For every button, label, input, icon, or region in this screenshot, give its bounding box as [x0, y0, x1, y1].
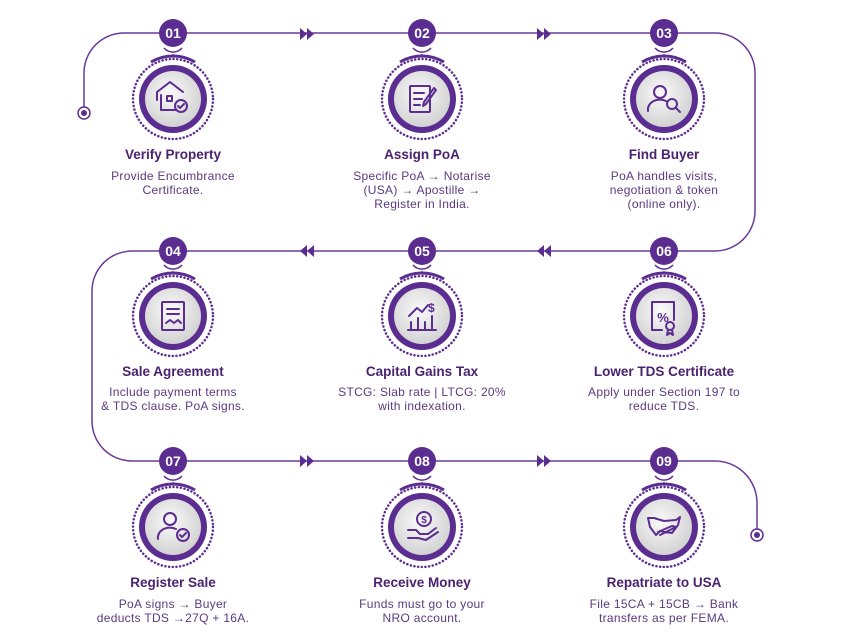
icon: chart: $: [428, 301, 435, 315]
step 05: with indexation.: [377, 399, 466, 413]
step 05: STCG: Slab rate | LTCG: 20%: [338, 385, 506, 399]
step 02: Register in India.: [374, 197, 470, 211]
icon: usa plane: [648, 517, 680, 535]
step 09: Repatriate to USA: [607, 575, 722, 590]
step 01: 01: [165, 25, 181, 41]
start dot: [78, 107, 90, 119]
icon: house check: [157, 82, 187, 112]
timeline path: [84, 33, 757, 535]
step 07: deducts TDS →27Q + 16A.: [97, 611, 249, 625]
step 02: [353, 19, 491, 211]
step 08: [359, 447, 485, 625]
step 05: 05: [414, 243, 430, 259]
step 04: & TDS clause. PoA signs.: [101, 399, 245, 413]
step 05: Capital Gains Tax: [366, 364, 479, 379]
step 04: Sale Agreement: [122, 364, 224, 379]
end dot: [751, 529, 763, 541]
step 02: (USA) → Apostille →: [363, 183, 481, 197]
step 03: (online only).: [628, 197, 700, 211]
step 01: Verify Property: [125, 147, 222, 162]
arrows: [300, 28, 551, 467]
step 01: [111, 19, 235, 197]
step 03: PoA handles visits,: [611, 169, 717, 183]
step 08: 08: [414, 453, 430, 469]
step 04: 04: [165, 243, 181, 259]
step 06: Lower TDS Certificate: [594, 364, 735, 379]
icon: certificate percent: [652, 302, 674, 335]
step 08: Receive Money: [373, 575, 471, 590]
step 06: reduce TDS.: [629, 399, 699, 413]
step 09: File 15CA + 15CB → Bank: [590, 597, 739, 611]
icon: agreement: [162, 302, 184, 330]
step 05: [338, 237, 506, 413]
step 08: $: [421, 515, 427, 526]
step 03: negotiation & token: [610, 183, 718, 197]
step 08: NRO account.: [383, 611, 461, 625]
icon: person search: [648, 86, 680, 112]
step 09: [590, 447, 739, 625]
step 01: Certificate.: [143, 183, 203, 197]
step 06: Apply under Section 197 to: [588, 385, 740, 399]
step 07: Register Sale: [130, 575, 216, 590]
step 09: transfers as per FEMA.: [599, 611, 729, 625]
step 02: Assign PoA: [384, 147, 460, 162]
step 06: 06: [656, 243, 672, 259]
step 07: [97, 447, 249, 625]
step 03: 03: [656, 25, 672, 41]
icon: hand coin: [408, 512, 438, 540]
step 03: Find Buyer: [629, 147, 700, 162]
step 06: %: [657, 310, 669, 325]
step 08: Funds must go to your: [359, 597, 485, 611]
step 01: Provide Encumbrance: [111, 169, 235, 183]
icon: chart: [408, 301, 436, 330]
step 04: Include payment terms: [109, 385, 237, 399]
step 09: 09: [656, 453, 672, 469]
step 06: [588, 237, 740, 413]
step 04: [101, 237, 245, 413]
step 02: Specific PoA → Notarise: [353, 169, 491, 183]
step 03: [610, 19, 718, 211]
icon: document pen: [410, 86, 436, 112]
step 07: PoA signs → Buyer: [119, 597, 227, 611]
icon: person check: [158, 513, 189, 541]
step 07: 07: [165, 453, 181, 469]
step 02: 02: [414, 25, 430, 41]
